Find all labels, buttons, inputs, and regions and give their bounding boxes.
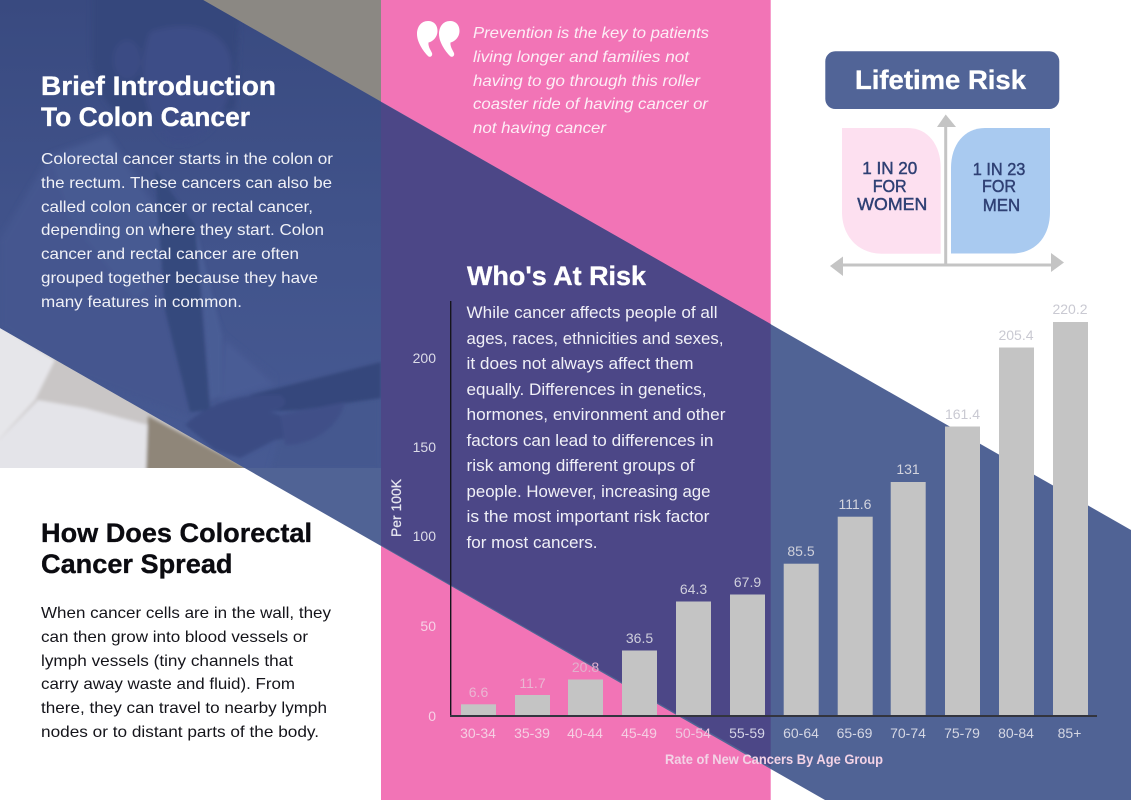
background photo: doctor holding tablet	[0, 0, 381, 475]
panel: pink column	[381, 0, 771, 800]
x axis labels: 50-54	[675, 725, 711, 741]
x axis title: Rate of New Cancers By Age Group	[665, 751, 883, 767]
x axis labels	[460, 725, 1081, 741]
x axis labels: 40-44	[567, 725, 603, 741]
heading: brief introduction	[41, 71, 276, 132]
text block: who's at risk: hormones, environment and other	[466, 406, 726, 424]
card: men risk: MEN	[983, 195, 1020, 215]
x axis labels: 85+	[1058, 725, 1081, 741]
heading: brief introduction: Brief Introduction	[41, 71, 276, 101]
quote text	[473, 25, 709, 137]
text block: who's at risk: factors can lead to differences in	[466, 432, 714, 450]
text block: who's at risk: people. However, increasing age	[466, 483, 710, 501]
y axis labels: 150	[413, 439, 436, 455]
text block: how cancer spreads: nodes or to distant parts of the body.	[41, 724, 319, 741]
arrows: quadrant axes	[830, 114, 1064, 276]
text block: who's at risk: While cancer affects people of all	[466, 304, 718, 322]
text block: who's at risk	[466, 304, 726, 552]
y axis title: Per 100K	[388, 478, 404, 537]
bars	[461, 322, 1088, 716]
x axis labels: 65-69	[837, 725, 873, 741]
text block: introduction: many features in common.	[41, 294, 242, 311]
lifetime risk heading box	[825, 51, 1059, 109]
text block: who's at risk: for most cancers.	[466, 534, 598, 552]
text block: how cancer spreads: there, they can travel to nearby lymph	[41, 700, 327, 717]
text block: introduction: cancer and rectal cancer are often	[41, 246, 299, 263]
card: men risk: FOR	[982, 176, 1016, 196]
card: men risk	[951, 128, 1050, 254]
text block: introduction: Colorectal cancer starts in the colon or	[41, 151, 334, 168]
y axis labels: 50	[420, 618, 436, 634]
quote text: coaster ride of having cancer or	[473, 96, 709, 113]
quote text: not having cancer	[473, 120, 607, 137]
icon: quotation marks	[417, 21, 460, 57]
y axis labels: 100	[413, 528, 436, 544]
text block: introduction	[41, 151, 334, 311]
card: men risk: 1 IN 23	[973, 159, 1025, 179]
value labels: 64.3	[680, 581, 707, 597]
value labels: 220.2	[1052, 301, 1088, 317]
text block: introduction: called colon cancer or rectal cancer,	[41, 199, 313, 216]
text block: how cancer spreads: can then grow into blood vessels or	[41, 629, 309, 646]
x axis labels: 60-64	[783, 725, 819, 741]
lifetime risk heading box: Lifetime Risk	[855, 65, 1027, 95]
heading: how does colorectal cancer spread	[41, 518, 312, 579]
text block: who's at risk: ages, races, ethnicities and sexes,	[466, 330, 724, 348]
photo seen through band	[0, 0, 381, 470]
text block: introduction: depending on where they start. Colon	[41, 222, 324, 239]
quote text: having to go through this roller	[473, 73, 701, 90]
value labels: 85.5	[787, 543, 815, 559]
value labels	[469, 301, 1088, 700]
panel: band over pink column	[381, 102, 771, 767]
card: women risk: 1 IN 20	[862, 158, 918, 178]
bar chart: rate of new cancers by age group	[388, 301, 1097, 767]
text block: how cancer spreads	[41, 605, 331, 741]
x axis labels: 55-59	[729, 725, 765, 741]
text block: how cancer spreads: lymph vessels (tiny channels that	[41, 653, 294, 670]
text block: who's at risk: it does not always affect them	[466, 355, 694, 373]
axes	[450, 301, 1097, 717]
text block: introduction: grouped together because they have	[41, 270, 318, 287]
text block: introduction: the rectum. These cancers can also be	[41, 175, 332, 192]
text block: who's at risk: risk among different groups of	[466, 457, 695, 475]
text block: who's at risk: is the most important risk factor	[466, 508, 710, 526]
quote text: Prevention is the key to patients	[473, 25, 709, 42]
x axis labels: 35-39	[514, 725, 550, 741]
x axis labels: 45-49	[621, 725, 657, 741]
card: women risk: FOR	[873, 176, 907, 196]
y axis labels: 200	[413, 350, 436, 366]
heading: how does colorectal cancer spread: Cancer Spread	[41, 549, 232, 579]
value labels: 131	[896, 461, 920, 477]
value labels: 205.4	[998, 327, 1034, 343]
quote text: living longer and families not	[473, 49, 690, 66]
value labels: 36.5	[626, 630, 653, 646]
value labels: 161.4	[945, 406, 980, 422]
x axis labels: 70-74	[890, 725, 926, 741]
heading: who's at risk: Who's At Risk	[467, 261, 647, 291]
value labels: 6.6	[469, 684, 488, 700]
y axis labels: 0	[428, 708, 436, 724]
text block: who's at risk: equally. Differences in genetics,	[466, 381, 706, 399]
card: women risk	[842, 128, 941, 254]
card: women risk: WOMEN	[857, 194, 927, 214]
heading: brief introduction: To Colon Cancer	[41, 102, 250, 132]
value labels: 20.8	[572, 659, 599, 675]
y axis labels	[413, 350, 436, 724]
x axis labels: 75-79	[944, 725, 980, 741]
text block: how cancer spreads: When cancer cells are in the wall, they	[41, 605, 331, 622]
x axis labels: 30-34	[460, 725, 496, 741]
text block: how cancer spreads: carry away waste and fluid). From	[41, 676, 295, 693]
value labels: 67.9	[734, 574, 761, 590]
value labels: 11.7	[519, 675, 546, 691]
heading: how does colorectal cancer spread: How Does Colorectal	[41, 518, 312, 548]
value labels: 111.6	[839, 496, 872, 512]
x axis labels: 80-84	[998, 725, 1034, 741]
